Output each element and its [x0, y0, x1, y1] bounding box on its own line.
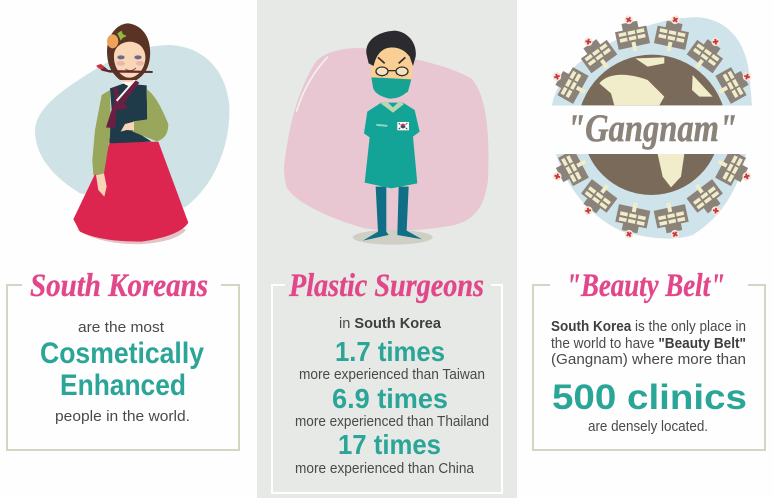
Gangnam white band: [549, 106, 757, 154]
left sleeve: [92, 90, 111, 175]
panel frame: [7, 285, 239, 450]
ear loops: [371, 80, 411, 95]
stat caption: Taiwan: more experienced than Taiwan: [299, 367, 485, 383]
stat caption: Thailand: more experienced than Thailand: [295, 414, 489, 430]
emphasis text: Enhanced: [60, 369, 186, 402]
land shape: [658, 154, 684, 187]
blue blob behind woman: [35, 45, 229, 207]
legs: [363, 187, 422, 241]
hand on waist: [121, 122, 134, 132]
hair: [366, 31, 416, 66]
panel: South Koreans: [7, 268, 239, 450]
face: [114, 42, 145, 78]
Korean flag badge: [397, 122, 409, 130]
closing text: are densely located.: [588, 419, 708, 435]
white accent strokes: [43, 62, 105, 95]
blush: [116, 61, 144, 66]
right sleeve: [133, 89, 168, 141]
heading: South Koreans: [30, 268, 208, 304]
centre column background: [257, 0, 517, 498]
pink blob behind surgeon: [284, 48, 488, 231]
jacket: [106, 83, 152, 143]
panel frame: [533, 285, 765, 450]
stat: Taiwan: 1.7 times: [335, 336, 445, 367]
jacket collar and ribbon: [106, 80, 139, 128]
stat: China: 17 times: [338, 429, 441, 460]
lower hand: [96, 173, 107, 197]
neck: [123, 72, 133, 82]
skirt shadow: [77, 227, 186, 244]
emphasis text: Cosmetically: [40, 337, 204, 370]
panel: Plastic Surgeons: [272, 268, 502, 493]
blue blob: [552, 17, 752, 239]
intro text: are the most: [78, 320, 164, 336]
mask: [371, 77, 411, 99]
big stat: 500 clinics: [552, 378, 747, 417]
red pin tip: [95, 62, 105, 70]
breast pocket mark: [376, 124, 387, 127]
glasses: [376, 67, 408, 76]
scrubs: [364, 103, 420, 188]
intro text: in South Korea: [339, 316, 442, 332]
eyebrows: [378, 57, 405, 63]
panel frame: [272, 285, 502, 493]
green leaf ornament: [117, 31, 127, 41]
closing text: people in the world.: [55, 409, 190, 425]
upper clinic ring: [545, 12, 759, 106]
illustration: surgeon: [284, 31, 488, 245]
description line 1: South Korea is the only place in: [551, 319, 746, 335]
white collar line: [116, 78, 136, 102]
land shapes: [599, 57, 713, 105]
hair pin: [97, 63, 153, 73]
orange hair ornament: [107, 34, 118, 48]
heading: "Beauty Belt": [566, 268, 725, 304]
globe upper half: [581, 54, 723, 106]
globe lower half: [588, 154, 714, 195]
description line 2: the world to have "Beauty Belt": [551, 336, 746, 352]
ground shadow: [353, 230, 433, 245]
panel: Beauty Belt: [533, 268, 765, 450]
stat: Thailand: 6.9 times: [332, 383, 448, 414]
white accent stroke: [296, 57, 328, 112]
heading: Plastic Surgeons: [288, 268, 484, 304]
description line 3: (Gangnam) where more than: [551, 352, 746, 368]
illustration: woman in hanbok: [35, 23, 229, 244]
skirt: [73, 142, 188, 242]
face: [370, 43, 414, 79]
smile: [125, 68, 136, 71]
hair back: [107, 23, 150, 80]
lower clinic ring: [546, 147, 758, 242]
scrubs collar: [381, 101, 404, 113]
stat caption: China: more experienced than China: [295, 461, 475, 477]
Gangnam label: "Gangnam": [567, 107, 737, 150]
eyes: [117, 55, 142, 59]
illustration: Gangnam globe with clinics: [545, 12, 759, 242]
